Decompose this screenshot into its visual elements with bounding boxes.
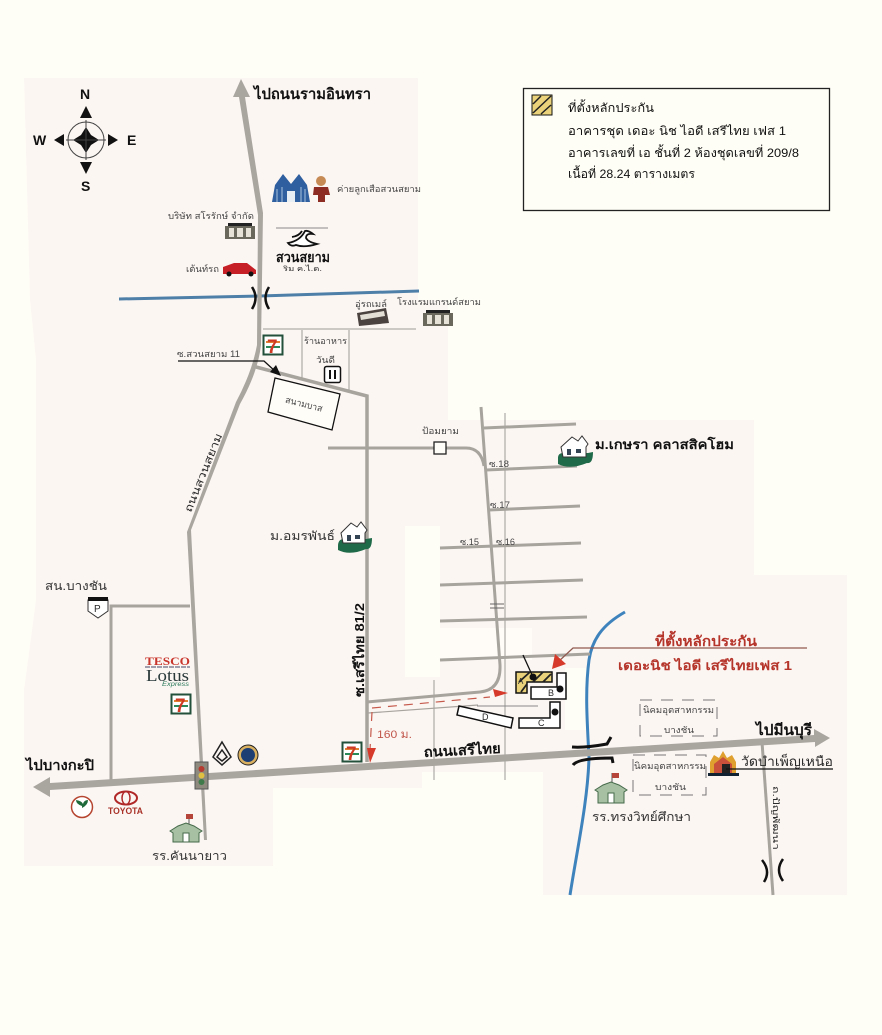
bridge lower right — [762, 859, 783, 882]
icon: 7-Eleven upper: 7 — [267, 337, 278, 358]
building C: C — [538, 718, 545, 728]
bridge on canal south — [572, 737, 613, 765]
logo: Tesco Lotus Express: Lotus — [146, 666, 189, 685]
icon: temple — [708, 751, 739, 776]
icon: 7-Eleven at Tesco: 7 — [175, 696, 186, 717]
compass: W — [33, 132, 47, 148]
legend text lines: อาคารเลขที่ เอ ชั้นที่ 2 ห้องชุดเลขที่ 209/8 — [568, 144, 799, 161]
logo: Tesco Lotus Express: Express — [162, 682, 189, 688]
main road ถนนเสรีไทย with two arrows — [33, 729, 830, 797]
legend box — [524, 88, 830, 210]
icon: Song Wittaya school — [595, 773, 627, 803]
red callout line and arrow — [552, 648, 807, 669]
callout heading: ที่ตั้งหลักประกัน — [655, 630, 757, 649]
label: soi 17: ซ.17 — [490, 500, 510, 510]
label and arrow: soi Suan Siam 11: ซ.สวนสยาม 11 — [177, 349, 240, 359]
icon: restaurant sign — [324, 366, 340, 382]
label and arrow: soi Suan Siam 11 — [177, 349, 281, 376]
industrial estate lower: บางชัน — [655, 782, 686, 792]
label: guard post: ป้อมยาม — [422, 426, 459, 436]
legend text lines: เนื้อที่ 28.24 ตารางเมตร — [568, 165, 696, 181]
label: to Min Buri: ไปมีนบุรี — [754, 720, 813, 740]
label: company: บริษัท สโรรักษ์ จำกัด — [168, 210, 254, 221]
icon: village Kasara — [558, 436, 593, 467]
icon: company building — [225, 223, 255, 239]
icon: Khan Na Yao school — [170, 814, 202, 842]
building A target with hatch: A — [518, 677, 524, 686]
icon: village Amornphan — [338, 522, 372, 553]
road: ซ.เสรีไทย 81/2 — [256, 367, 367, 762]
label: Amornphan village: ม.อมรพันธ์ — [270, 529, 335, 543]
legend swatch — [532, 95, 552, 115]
industrial estate lower: นิคมอุตสาหกรรม — [634, 761, 706, 772]
blue canal east-west — [119, 291, 419, 299]
thin grid lines — [263, 329, 505, 780]
label: Suan Siam road: ถนนสวนสยาม — [183, 432, 225, 514]
label: restaurant name: วันดี — [316, 355, 335, 365]
icon: bank round logo — [238, 745, 258, 765]
basketball court: สนามบาส — [284, 395, 324, 414]
legend text lines: ที่ตั้งหลักประกัน — [568, 99, 654, 115]
building C — [519, 702, 560, 728]
label: car tent: เต้นท์รถ — [186, 263, 219, 274]
icon: guard post — [434, 442, 446, 454]
basketball court — [268, 378, 340, 430]
icon: hotel — [423, 310, 453, 326]
building D — [457, 706, 513, 728]
icon: scout camp tent — [272, 174, 310, 202]
red arrow to main road — [367, 748, 376, 763]
label: 160 m: 160 ม. — [377, 729, 412, 741]
logo: Toyota — [108, 792, 143, 816]
break mark on soi road — [490, 604, 504, 608]
logo: Suan Siam — [276, 228, 330, 273]
red route arrow — [493, 689, 508, 697]
label: Wat Bamphen Nuea: วัดบำเพ็ญเหนือ — [741, 752, 833, 769]
label: side road right: ถ.ปัญพัฒนา — [771, 786, 781, 850]
logo: Suan Siam: สวนสยาม — [276, 249, 330, 265]
legend text lines: อาคารชุด เดอะ นิช ไอดี เสรีไทย เฟส 1 — [568, 124, 786, 139]
compass — [33, 86, 136, 194]
icon: red car — [223, 263, 256, 276]
icon: bank diamond logo — [213, 742, 231, 765]
logo: Toyota: TOYOTA — [108, 806, 143, 816]
label: Bang Chan bus station: สน.บางชัน — [45, 579, 107, 593]
building A target with hatch — [516, 655, 552, 693]
label: Khan Na Yao school: รร.คันนายาว — [152, 849, 227, 863]
label: Seri Thai road: ถนนเสรีไทย — [423, 739, 501, 760]
industrial estate upper — [640, 700, 717, 736]
icon: parking police shield: P — [94, 604, 101, 615]
icon: scout figure — [313, 176, 330, 202]
red dashed route — [370, 697, 490, 750]
building D: D — [482, 712, 489, 722]
main road north with arrow — [187, 79, 263, 840]
callout subheading: เดอะนิช ไอดี เสรีไทยเฟส 1 — [618, 657, 792, 673]
building B — [531, 673, 566, 699]
compass: S — [81, 178, 90, 194]
bridge on canal north — [252, 287, 269, 309]
compass: N — [80, 86, 90, 102]
icon: 7-Eleven at Tesco — [172, 694, 190, 717]
label: hotel: โรงแรมแกรนด์สยาม — [397, 296, 481, 307]
icon: traffic light — [195, 762, 208, 789]
icon: Kasikorn bank — [72, 796, 92, 818]
blue canal north-south — [570, 612, 625, 895]
industrial estate upper: บางชัน — [664, 725, 694, 735]
icon: 7-Eleven at Seri Thai — [342, 742, 362, 765]
label: soi 15: ซ.15 — [460, 537, 479, 547]
heading: to Ram Intra road: ไปถนนรามอินทรา — [252, 84, 371, 103]
label: to Bang Kapi: ไปบางกะปิ — [24, 756, 94, 773]
label: soi 18: ซ.18 — [489, 459, 509, 469]
icon: 7-Eleven upper — [264, 336, 282, 358]
icon: 7-Eleven at Seri Thai: 7 — [346, 744, 357, 765]
thin lane by buildings — [477, 705, 538, 707]
icon: bus — [357, 308, 389, 326]
industrial estate upper: นิคมอุตสาหกรรม — [643, 705, 714, 716]
label: soi 16: ซ.16 — [496, 537, 515, 547]
side streets — [111, 407, 773, 895]
label: Kasara Classic Home: ม.เกษรา คลาสสิคโฮม — [595, 436, 734, 452]
industrial estate lower — [633, 755, 706, 795]
label: Song Wittaya school: รร.ทรงวิทย์ศึกษา — [592, 810, 691, 824]
logo: Tesco Lotus Express — [145, 654, 190, 688]
label: bus depot: อู่รถเมล์ — [355, 298, 387, 310]
label: soi Seri Thai 81/2: ซ.เสรีไทย 81/2 — [351, 603, 367, 697]
logo: Tesco Lotus Express: TESCO — [145, 654, 190, 668]
icon: parking police shield — [88, 597, 108, 618]
label: scout camp: ค่ายลูกเสือสวนสยาม — [337, 184, 421, 195]
legend text lines — [568, 99, 799, 181]
label: restaurant: ร้านอาหาร — [304, 336, 347, 346]
compass: E — [127, 132, 136, 148]
logo: Suan Siam: ริม ค.ไ.ด. — [283, 264, 322, 273]
building B: B — [548, 688, 554, 698]
